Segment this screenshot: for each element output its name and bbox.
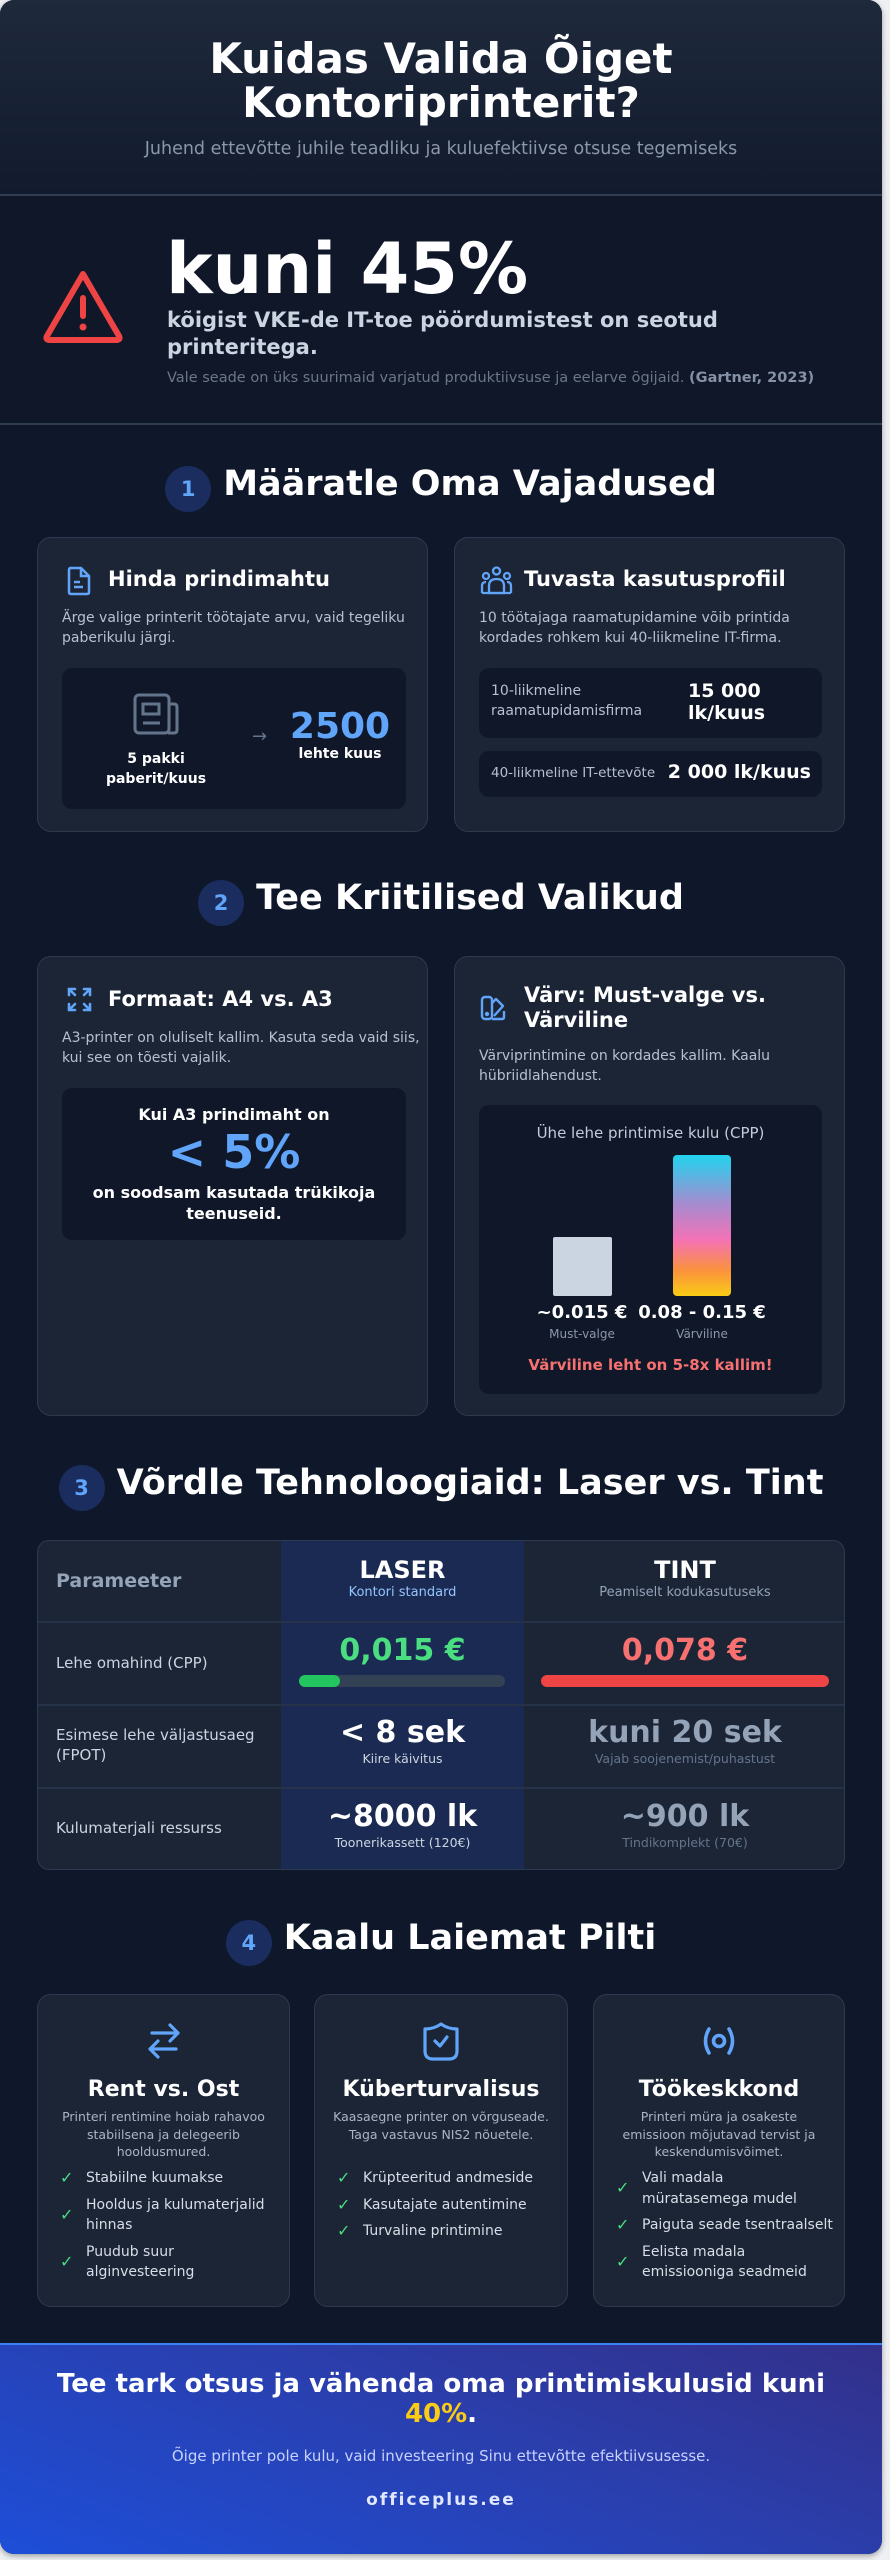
bar chart: CPP: Must-valge bbox=[549, 1327, 615, 1341]
bar chart: CPP: ~0.015 € bbox=[537, 1302, 627, 1323]
row: consumables: Toonerikassett (120€) bbox=[335, 1835, 470, 1850]
bar chart: CPP: Ühe lehe printimise kulu (CPP) bbox=[537, 1124, 764, 1142]
panel: rent vs buy: Hooldus ja kulumaterjalid bbox=[86, 2196, 264, 2212]
panel: rent vs buy: stabiilsena ja delegeerib bbox=[87, 2126, 240, 2142]
callout box: Kui A3 prindimaht on bbox=[138, 1105, 330, 1124]
heading: Värv: Must-valge vs. bbox=[524, 983, 766, 1007]
panel: work environment: keskendumisvõimet. bbox=[655, 2144, 783, 2159]
stat text: printeritega. bbox=[167, 335, 318, 359]
row: CPP: 0,015 € bbox=[339, 1633, 466, 1668]
panel: usage profile bbox=[454, 537, 845, 832]
icon: warning bbox=[43, 271, 123, 343]
row: consumables: Tindikomplekt (70€) bbox=[622, 1835, 748, 1850]
section 2 heading: Tee Kriitilised Valikud bbox=[256, 878, 684, 918]
panel: work environment: müratasemega mudel bbox=[642, 2190, 797, 2206]
panel: cybersecurity: Krüpteeritud andmeside bbox=[363, 2170, 533, 2186]
text bbox=[479, 610, 790, 646]
bar chart: CPP: Värviline bbox=[676, 1327, 728, 1341]
brand: officeplus.ee bbox=[366, 2490, 516, 2510]
panel: print volume bbox=[37, 537, 428, 832]
header row: Parameeter bbox=[56, 1570, 181, 1592]
heading: Tuvasta kasutusprofiil bbox=[524, 567, 786, 591]
bar: black-white bbox=[553, 1237, 612, 1296]
arrow: → bbox=[252, 726, 267, 747]
panel: work environment: Paiguta seade tsentraalselt bbox=[642, 2217, 833, 2233]
bar chart: CPP: Värviline leht on 5-8x kallim! bbox=[528, 1356, 773, 1374]
text: hübriidlahendust. bbox=[479, 1068, 602, 1084]
panel: cybersecurity: Taga vastavus NIS2 nõuetele. bbox=[349, 2126, 533, 2142]
row: accounting firm bbox=[479, 668, 822, 738]
panel: rent vs buy: hooldusmured. bbox=[117, 2144, 210, 2159]
heading: Hinda prindimahtu bbox=[108, 567, 330, 591]
panel: rent vs buy: alginvesteering bbox=[86, 2264, 194, 2280]
icon: paper stack bbox=[134, 694, 178, 734]
header row bbox=[56, 1556, 771, 1600]
row: FPOT: Vajab soojenemist/puhastust bbox=[595, 1751, 775, 1766]
stat text bbox=[167, 308, 718, 359]
panel: rent vs buy: ✓ bbox=[60, 2205, 73, 2224]
stat section bbox=[0, 196, 882, 425]
panel: work environment: emissiooniga seadmeid bbox=[642, 2264, 807, 2280]
calculation box: lehte kuus bbox=[299, 746, 381, 762]
row: accounting firm: lk/kuus bbox=[688, 702, 765, 724]
bar chart: CPP: 0.08 - 0.15 € bbox=[638, 1302, 766, 1323]
icon: document bbox=[68, 566, 90, 596]
calculation box bbox=[62, 668, 406, 809]
panel: rent vs buy: Rent vs. Ost bbox=[88, 2077, 239, 2102]
row: FPOT: kuni 20 sek bbox=[588, 1715, 782, 1750]
panel: work environment: Printeri müra ja osakeste bbox=[641, 2109, 797, 2124]
title: Kuidas Valida Õiget bbox=[209, 34, 673, 83]
callout box: teenuseid. bbox=[186, 1204, 282, 1223]
row: FPOT bbox=[56, 1715, 782, 1766]
section 3 heading: Võrdle Tehnoloogiaid: Laser vs. Tint bbox=[117, 1463, 823, 1503]
text: kordades rohkem kui 40-liikmeline IT-firma. bbox=[479, 630, 782, 646]
bar chart: CPP bbox=[479, 1105, 822, 1394]
icon: shield bbox=[423, 2022, 459, 2061]
icon: people bbox=[480, 566, 512, 594]
panel: rent vs buy: Stabiilne kuumakse bbox=[86, 2170, 223, 2186]
panel: cybersecurity: ✓ bbox=[337, 2194, 350, 2214]
panel: work environment: Vali madala bbox=[642, 2170, 723, 2186]
header row: TINT bbox=[654, 1556, 716, 1584]
label: packs bbox=[106, 751, 206, 787]
footer bbox=[0, 2343, 882, 2554]
panel: rent vs buy: Puudub suur bbox=[86, 2244, 174, 2260]
panel: work environment: emissioon mõjutavad tervist ja bbox=[623, 2126, 815, 2142]
icon: arrows swap bbox=[148, 2023, 180, 2059]
panel: cybersecurity: Kaasaegne printer on võrguseade. bbox=[333, 2109, 549, 2124]
callout box: on soodsam kasutada trükikoja bbox=[93, 1183, 375, 1202]
panel: format bbox=[37, 956, 428, 1416]
subtitle: Juhend ettevõtte juhile teadliku ja kuluefektiivse otsuse tegemiseks bbox=[145, 139, 737, 159]
panel: cybersecurity: ✓ bbox=[337, 2221, 350, 2240]
callout box bbox=[62, 1088, 406, 1240]
source note: Vale seade on üks suurimaid varjatud produktiivsuse ja eelarve õgijaid. (Gartner, 2023) bbox=[167, 370, 814, 386]
row: consumables: ~900 lk bbox=[621, 1799, 749, 1834]
section 4 heading: 4 bbox=[241, 1931, 256, 1955]
panel: cybersecurity: Turvaline printimine bbox=[363, 2223, 502, 2239]
row: consumables bbox=[56, 1799, 750, 1850]
text bbox=[479, 1048, 770, 1084]
icon: colour swatch bbox=[480, 996, 506, 1020]
row: IT company: 40-liikmeline IT-ettevõte bbox=[491, 765, 655, 781]
text: Ärge valige printerit töötajate arvu, vaid tegeliku bbox=[62, 610, 405, 626]
text: A3-printer on oluliselt kallim. Kasuta seda vaid siis, bbox=[62, 1030, 420, 1046]
row: IT company bbox=[479, 751, 822, 797]
stat text: kõigist VKE-de IT-toe pöördumistest on seotud bbox=[167, 308, 718, 332]
panel: rent vs buy: Printeri rentimine hoiab rahavoo bbox=[62, 2109, 265, 2124]
panel: work environment: Töökeskkond bbox=[639, 2077, 799, 2102]
footer headline: 40%. bbox=[405, 2399, 477, 2429]
row: FPOT: Kiire käivitus bbox=[362, 1751, 443, 1766]
icon: broadcast bbox=[704, 2027, 734, 2055]
row: CPP: 0,078 € bbox=[622, 1633, 748, 1668]
title bbox=[209, 34, 673, 127]
label: packs: paberit/kuus bbox=[106, 771, 206, 787]
comparison table bbox=[37, 1540, 845, 1870]
panel: rent vs buy: ✓ bbox=[60, 2252, 73, 2271]
section 2 heading: 2 bbox=[214, 891, 228, 915]
text: paberikulu järgi. bbox=[62, 630, 176, 646]
section 1 heading: 1 bbox=[181, 477, 196, 501]
row: CPP: Lehe omahind (CPP) bbox=[56, 1654, 208, 1672]
panel: rent vs buy: hinnas bbox=[86, 2217, 132, 2233]
text: Värviprintimine on kordades kallim. Kaalu bbox=[479, 1048, 770, 1064]
heading: Värviline bbox=[524, 1008, 628, 1032]
row: CPP bbox=[56, 1633, 829, 1687]
row: IT company: 2 000 lk/kuus bbox=[668, 761, 811, 783]
value 2500: 2500 bbox=[290, 706, 390, 747]
bar: colour bbox=[673, 1155, 731, 1296]
row: accounting firm: 10-liikmeline bbox=[491, 683, 581, 699]
row: FPOT: < 8 sek bbox=[340, 1715, 465, 1750]
row: consumables: ~8000 lk bbox=[328, 1799, 477, 1834]
panel: work environment bbox=[593, 1994, 845, 2307]
panel: cybersecurity: ✓ bbox=[337, 2168, 350, 2187]
panel: colour bbox=[454, 956, 845, 1416]
panel: work environment: ✓ bbox=[616, 2178, 629, 2197]
title: Kontoriprinterit? bbox=[242, 78, 640, 127]
big stat: kuni 45% bbox=[166, 228, 528, 310]
row: accounting firm: raamatupidamisfirma bbox=[491, 703, 642, 719]
panel: work environment: Eelista madala bbox=[642, 2244, 745, 2260]
row: accounting firm: 15 000 bbox=[688, 680, 761, 702]
section 4 heading: Kaalu Laiemat Pilti bbox=[284, 1918, 656, 1958]
header row: Peamiselt kodukasutuseks bbox=[599, 1585, 771, 1600]
panel: rent vs buy bbox=[37, 1994, 290, 2307]
text bbox=[62, 1030, 420, 1066]
row: consumables: Kulumaterjali ressurss bbox=[56, 1819, 222, 1837]
section 3 heading: 3 bbox=[74, 1476, 89, 1500]
section 1 heading: Määratle Oma Vajadused bbox=[223, 464, 717, 504]
header row: Kontori standard bbox=[349, 1585, 456, 1600]
panel: cybersecurity: Kasutajate autentimine bbox=[363, 2196, 527, 2212]
panel: rent vs buy: ✓ bbox=[60, 2168, 73, 2187]
row: FPOT: Esimese lehe väljastusaeg bbox=[56, 1726, 255, 1744]
footer headline: Tee tark otsus ja vähenda oma printimiskulusid kuni bbox=[57, 2369, 825, 2399]
header row: LASER bbox=[359, 1556, 446, 1584]
heading bbox=[524, 983, 766, 1032]
callout box: < 5% bbox=[168, 1125, 300, 1179]
panel: cybersecurity bbox=[314, 1994, 568, 2307]
footer headline bbox=[57, 2369, 825, 2429]
text: 10 töötajaga raamatupidamine võib printida bbox=[479, 610, 790, 626]
text: kui see on tõesti vajalik. bbox=[62, 1050, 231, 1066]
row: FPOT: (FPOT) bbox=[56, 1746, 106, 1764]
panel: work environment: ✓ bbox=[616, 2215, 629, 2234]
footer text: Õige printer pole kulu, vaid investeering Sinu ettevõtte efektiivsusesse. bbox=[172, 2447, 710, 2465]
panel: work environment: ✓ bbox=[616, 2252, 629, 2271]
panel: cybersecurity: Küberturvalisus bbox=[342, 2077, 540, 2102]
header bbox=[0, 0, 882, 196]
text bbox=[62, 609, 405, 646]
icon: expand bbox=[68, 988, 92, 1012]
heading: Formaat: A4 vs. A3 bbox=[108, 987, 333, 1011]
label: packs: 5 pakki bbox=[127, 751, 185, 767]
